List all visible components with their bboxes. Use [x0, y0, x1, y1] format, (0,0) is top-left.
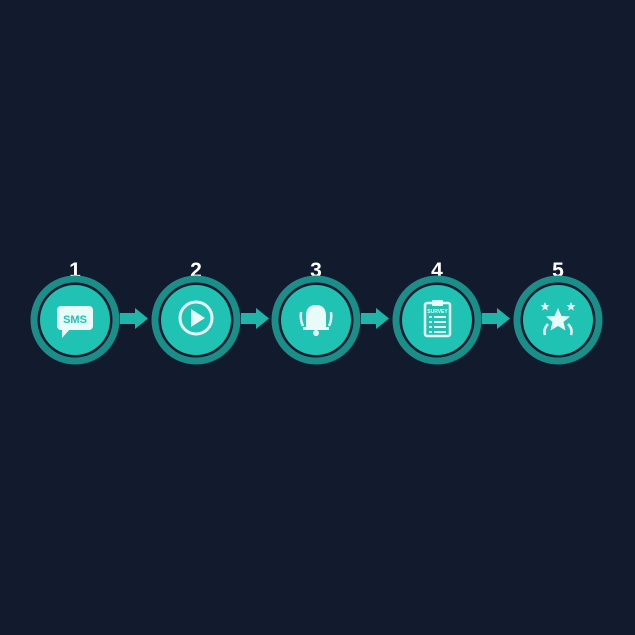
- step 4: survey: [396, 259, 478, 361]
- icon: rating stars: [540, 302, 576, 335]
- step 1: SMS: [34, 259, 116, 361]
- icon: sms bubble: SMS: [63, 314, 87, 326]
- arrow 2: [241, 308, 269, 329]
- number 1: 1: [69, 259, 81, 282]
- number 3: 3: [310, 259, 322, 282]
- number 4: 4: [431, 259, 443, 282]
- arrow 1: [120, 308, 148, 329]
- arrow 3: [361, 308, 389, 329]
- arrow 4: [482, 308, 510, 329]
- icon: play: [180, 302, 212, 334]
- number 5: 5: [552, 259, 564, 282]
- icon: bell: [301, 305, 331, 336]
- step 2: play: [155, 259, 237, 361]
- step 5: stars: [517, 259, 599, 361]
- step 3: bell: [275, 259, 357, 361]
- icon: clipboard: SURVEY: [427, 309, 448, 315]
- number 2: 2: [190, 259, 202, 282]
